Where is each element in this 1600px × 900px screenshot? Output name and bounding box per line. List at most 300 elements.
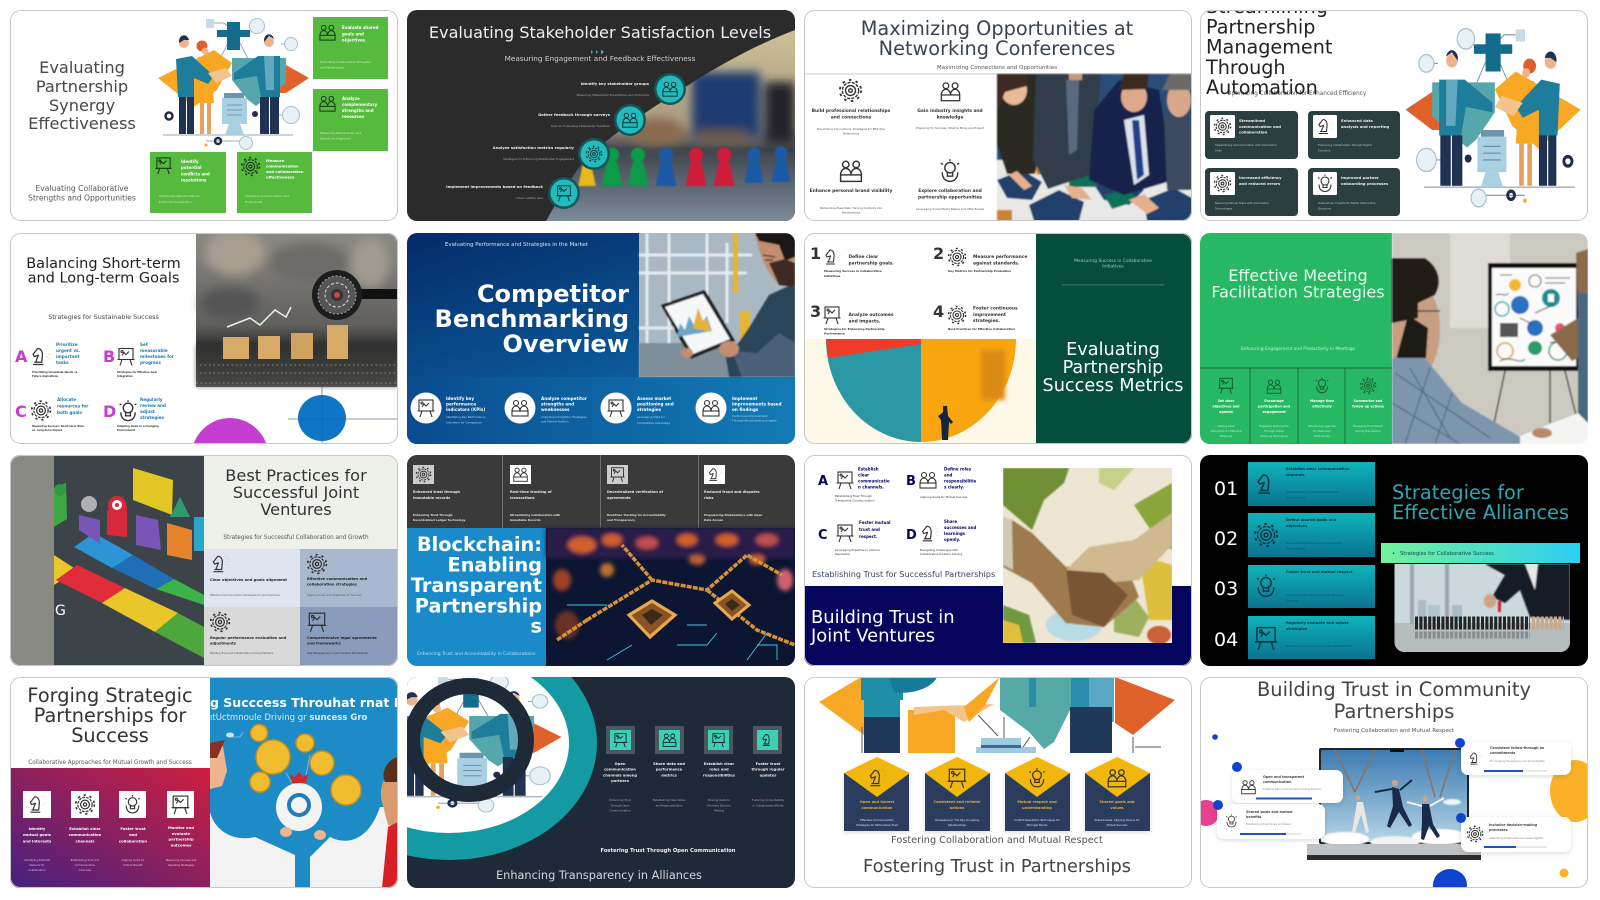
panel: communication: collaboration — [1239, 130, 1268, 135]
item: communication channels — [69, 791, 102, 872]
item: KPIs: Identifying Key Performance — [446, 415, 486, 419]
item: build relationships: Networking — [843, 132, 859, 136]
item C — [818, 520, 891, 556]
item A — [15, 342, 81, 378]
item B: and — [944, 472, 953, 478]
cell: communication — [300, 549, 397, 607]
item: KPIs — [410, 392, 486, 424]
title: Forging Strategic — [27, 684, 193, 707]
blue panel — [407, 528, 546, 666]
item B: s clearly. — [944, 484, 965, 490]
panel: shared goals: Evaluating Collaborative Strengths — [320, 60, 371, 64]
step 03: Alliances — [1286, 598, 1299, 602]
column: objectives: Set clear — [1218, 399, 1235, 403]
item C: Allocate — [57, 397, 76, 402]
title: Overview — [503, 330, 629, 358]
slide card: Building Trust in Joint Ventures — [804, 455, 1192, 666]
step: identify stakeholders: Identify key stakeholder groups — [581, 81, 650, 86]
item D: learnings — [944, 531, 966, 536]
callout: inclusive decision-making — [1456, 813, 1571, 852]
step: updates: updates — [760, 773, 777, 777]
item 2: Key Metrics for Partnership Evaluation — [948, 269, 1011, 273]
item: strengths: and Market Position — [541, 420, 569, 424]
step: roles: Informed Decision — [707, 803, 732, 807]
column: manage time: Structuring Agendas — [1308, 424, 1336, 428]
item: industry insights: knowledge — [937, 114, 963, 120]
card: shared goals: Mutual Success — [1107, 823, 1128, 827]
item: improvements — [696, 392, 782, 424]
cell: communication: Effective communication and — [307, 577, 368, 581]
panel: communication: Streamlining Communication with Automated — [1215, 143, 1277, 147]
item B: responsibilitie — [944, 478, 977, 484]
item D: Share — [944, 519, 957, 524]
title: Balancing Short-term — [26, 256, 181, 272]
column: objectives: agenda — [1219, 410, 1233, 414]
item C: Leveraging Expertise in Alliance — [835, 548, 880, 552]
callout: shared goals — [1213, 800, 1325, 839]
item: build relationships — [812, 80, 891, 136]
right panel — [1036, 233, 1192, 444]
column: objectives: Objectives for Effective — [1210, 429, 1242, 433]
panel: communication effectiveness — [237, 152, 312, 213]
item: foster trust: and — [129, 832, 137, 837]
column: summarize: During Discussions — [1355, 429, 1381, 433]
item A: Prioritizing Immediate Needs vs. — [32, 370, 78, 374]
cell: communication: collaboration strategies — [307, 582, 358, 586]
item 1: 1 — [810, 244, 821, 263]
column: tracking: Immutable Records — [510, 518, 541, 522]
subtitle: Evaluating Collaborative — [36, 184, 129, 193]
panel subtitle: Measuring Success in Collaborative — [1074, 258, 1152, 264]
column: objectives: objectives and — [1212, 404, 1240, 408]
item C: Foster mutual — [859, 520, 891, 525]
item: strengths: weaknesses — [541, 407, 570, 412]
item 2 — [933, 244, 1027, 273]
step: gather feedback — [538, 104, 646, 136]
column: trust: Enhanced trust through — [413, 490, 461, 494]
item C: trust and — [859, 527, 880, 532]
item: mutual goals: Partners for — [29, 863, 46, 867]
item: communication channels: Channels — [79, 868, 92, 872]
step 01: Development — [1286, 495, 1306, 499]
panel: shared goals: Evaluate shared — [342, 25, 379, 30]
step: gather feedback: Gather feedback through surveys — [538, 112, 611, 117]
title: Benchmarking — [435, 305, 629, 333]
photo: analyst with tablet in factory — [639, 233, 795, 377]
laptop with aerial team photo — [1307, 748, 1481, 860]
item 1: partnership goals. — [848, 260, 894, 266]
panel: conflicts and resolutions: Identifying Opportunities for — [159, 194, 201, 198]
callout: open communication: communication — [1263, 780, 1292, 784]
step 02: Define shared goals and — [1286, 518, 1337, 522]
item: foster trust: Mutual Benefit — [124, 863, 142, 867]
panel: communication effectiveness: and collaboration — [266, 169, 304, 174]
item: monitor outcomes: partnership — [168, 837, 194, 842]
slide card: Effective Meeting Facilitation Strategies — [1200, 233, 1588, 444]
item: mutual goals: Identifying Potential — [24, 858, 50, 862]
step 01: Establish clear communication — [1286, 467, 1350, 471]
item 4: Foster continuous — [973, 306, 1018, 312]
item D: D — [103, 402, 116, 421]
column: participation — [1258, 380, 1291, 438]
item 3: 3 — [810, 302, 821, 321]
panel: communication: Tools — [1214, 148, 1222, 152]
item: improvements: Implement — [732, 396, 757, 401]
gradient panel — [10, 768, 210, 888]
item 1: Measuring Success in Collaborative — [824, 269, 882, 273]
step: share data: Share data and — [653, 762, 685, 766]
title: Automation — [1206, 76, 1318, 99]
item 3: and impacts. — [848, 318, 881, 324]
slide card: Building Trust in Community Partnerships — [1193, 677, 1600, 900]
item: KPIs: Identify key — [446, 396, 474, 401]
step: share data: performance — [656, 768, 683, 772]
title: s — [531, 614, 542, 638]
step: analyze metrics: Analyze satisfaction metrics regularly — [493, 145, 575, 150]
cell: regular evaluation: Regular performance evaluation and — [210, 636, 287, 640]
step: open channels: Enhancing Trust — [609, 798, 631, 802]
item: personal brand: Enhance personal brand visibility — [810, 188, 892, 194]
callout: open communication: Fostering Open Communication Among Partners — [1263, 788, 1322, 791]
column: fraud: risks — [704, 496, 713, 500]
cell: legal agreements: Risk Management in Joint Venture Partnerships — [307, 651, 369, 655]
column: trust: Enhancing Trust Through — [413, 513, 452, 517]
panel: onboarding: Data-Driven Insights for Better Partnership — [1318, 201, 1376, 205]
slide card: Evaluating Stakeholder Satisfaction Levels — [407, 10, 795, 221]
item D: successes and — [944, 525, 976, 530]
step 04: Regularly evaluate and adjust — [1286, 621, 1349, 625]
step: updates: through regular — [751, 768, 785, 772]
photo: illustrated coins and handover — [210, 677, 402, 888]
title: Enhancing Transparency in Alliances — [496, 869, 702, 882]
card: shared goals: Shared goals and — [1099, 800, 1135, 804]
item C: both goals — [57, 410, 82, 415]
photo: wooden blocks and target lens — [196, 231, 398, 387]
cell: regular evaluation: adjustments — [210, 642, 237, 646]
title: Maximizing Opportunities at — [861, 17, 1134, 40]
subtitle: Enhancing Trust and Accountability in Collaborations — [417, 651, 536, 657]
item B: measurable — [140, 348, 168, 353]
step: open channels: Communication — [609, 809, 631, 813]
item: positioning: strategies — [637, 407, 661, 412]
item 3: Performance — [824, 332, 845, 336]
cell: communication: Aligning Goals and Objectives for Success — [307, 593, 362, 597]
column: participation: engagement — [1262, 410, 1286, 414]
step: implement improvements: Insert subtitle here — [516, 196, 543, 200]
subtitle: Maximizing Connections and Opportunities — [937, 65, 1057, 71]
slide card: Maximizing Opportunities at Networking Conferences — [804, 10, 1192, 221]
subtitle: Measuring Engagement and Feedback Effectiveness — [505, 54, 696, 63]
column: summarize: Summarize and — [1354, 399, 1383, 403]
card: consistent actions: Relationships — [948, 823, 967, 827]
title: Best Practices for — [225, 466, 367, 485]
callout: inclusive decision-making: Celebrating Collaborative Successes Together — [1489, 837, 1544, 840]
cell: legal agreements — [300, 607, 398, 666]
item D: Regularly — [140, 397, 163, 402]
card: open communication: Effective Communication — [860, 818, 894, 822]
column: summarize: Managing Time Wisely — [1353, 424, 1384, 428]
item: communication channels: communication — [69, 832, 102, 837]
subtitle: Collaborative Approaches for Mutual Growth and Success — [28, 760, 192, 766]
title: Partnerships for — [34, 704, 186, 727]
title: Partnership — [1206, 15, 1315, 38]
panel: efficiency: and reduced errors — [1239, 181, 1281, 186]
step: share data — [653, 726, 686, 807]
card: consistent actions: Consistent and reliable — [933, 800, 981, 804]
title: Success Metrics — [1042, 376, 1184, 396]
slide card: Streamlining Partnership Management Through Automation — [1200, 0, 1588, 221]
illustration: partners shaking hands — [158, 18, 309, 150]
step: updates — [751, 726, 785, 807]
step 02: Relationships — [1286, 546, 1306, 550]
item: KPIs: indicators (KPIs) — [446, 407, 485, 412]
column: tracking: transactions — [510, 496, 535, 500]
item: positioning: Competitive Advantage — [637, 421, 670, 425]
item: monitor outcomes: Monitor and — [168, 825, 194, 830]
photo: facilitator at board — [1392, 233, 1588, 444]
title: Networking Conferences — [879, 37, 1115, 60]
column: tracking: Real-time tracking of — [510, 490, 552, 494]
column: manage time: for Maximum — [1313, 429, 1331, 433]
step: share data: and Responsibilities — [656, 803, 683, 807]
item: partnership opportunities: Leveraging Social Media Before and After Events — [916, 207, 985, 211]
title: Blockchain: — [417, 533, 542, 556]
step: implement improvements: Implement improvements based on feedback — [446, 184, 543, 189]
title: Partnerships — [1334, 700, 1454, 723]
column: trust — [413, 465, 466, 522]
item 2: 2 — [933, 244, 944, 263]
panel: efficiency: Technologies — [1214, 206, 1233, 210]
panel: complementary strengths: strengths and — [342, 108, 374, 113]
title: Strategies for — [1392, 481, 1524, 504]
step: open channels: Through Open — [609, 803, 630, 807]
card: open communication — [844, 757, 910, 831]
column: manage time — [1308, 377, 1336, 438]
photo: blurred team and pawns — [546, 30, 795, 221]
title: Building Trust in Community — [1257, 678, 1531, 701]
slide card: Balancing Short-term and Long-term Goals — [10, 233, 398, 444]
item: partnership opportunities — [916, 159, 985, 211]
item 3: Strategies for Enhancing Partnership — [824, 327, 885, 331]
step 03 — [1214, 565, 1375, 608]
panel subtitle: Initiatives — [1102, 263, 1124, 269]
column: summarize: follow up actions — [1352, 404, 1384, 408]
column: objectives — [1210, 378, 1242, 438]
column: tracking: Streamlining Collaboration with — [510, 513, 560, 517]
item 4: improvement — [973, 312, 1006, 318]
step: share data: Establishing Clear Roles — [653, 798, 686, 802]
title: Joint Ventures — [810, 626, 935, 646]
panel: communication effectiveness: Analyzing Communication and — [245, 194, 289, 198]
photo: illustrated coins and handover: g Succcess Throuhat rnat F — [210, 695, 402, 710]
item D: adjust — [140, 409, 155, 414]
card: shared goals: values — [1110, 806, 1124, 810]
column: objectives: Setting Clear — [1217, 424, 1236, 428]
tagline: Fostering Trust Through Open Communication — [601, 848, 736, 854]
step 01 — [1214, 462, 1375, 506]
panel: conflicts and resolutions: resolutions — [181, 178, 207, 183]
step 04: Measuring the Impact of Collaborative Efforts — [1286, 644, 1352, 648]
step 03: Foster trust and mutual respect — [1286, 570, 1353, 574]
callout: consistent follow-through: commitments — [1490, 751, 1515, 755]
item 2: Measure performance — [973, 254, 1027, 260]
item: foster trust: collaboration — [119, 838, 147, 843]
item C: respect. — [859, 534, 878, 539]
step: open channels: channels among — [603, 773, 637, 777]
item C — [15, 397, 89, 432]
photo: glowing chain — [546, 528, 795, 666]
item: industry insights: Gain industry insights and — [917, 108, 983, 114]
panel: communication — [1205, 111, 1298, 159]
panel: shared goals — [313, 17, 388, 79]
card: mutual respect: understanding — [1022, 806, 1052, 810]
column: summarize — [1352, 378, 1384, 433]
title: Success — [71, 724, 149, 747]
panel: communication effectiveness: communication — [266, 164, 299, 168]
step 02 — [1214, 513, 1375, 557]
item: foster trust: Aligning Goals for — [122, 858, 145, 862]
decorative arrows icon — [591, 50, 604, 54]
step: roles: Making — [714, 809, 724, 813]
step: analyze metrics: Strategies for Enhancing Stakeholder Engagement — [503, 157, 575, 161]
callout: open communication: Open and transparent — [1263, 775, 1305, 779]
item D: Collaborative Problem-Solving — [920, 552, 962, 556]
callout: consistent follow-through — [1455, 738, 1571, 775]
step: gather feedback: Tools for Evaluating Stakeholder Feedback — [550, 124, 610, 128]
item 1 — [810, 244, 894, 278]
item 4 — [933, 302, 1018, 331]
column: manage time: Manage time — [1310, 399, 1335, 403]
panel: communication effectiveness: Measure — [266, 158, 285, 163]
card: open communication: Strategies for Partnership Trust — [856, 823, 898, 827]
column: objectives: Meetings — [1220, 434, 1233, 438]
item B: Aligning Goals for Mutual Success — [920, 495, 968, 499]
panel: data analysis: Solutions — [1318, 148, 1331, 152]
item 1: Initiatives — [824, 274, 841, 278]
item: industry insights — [916, 83, 985, 130]
item A: important — [56, 354, 80, 359]
item: foster trust — [119, 791, 147, 867]
step: analyze metrics — [493, 138, 610, 170]
subtitle: Fostering Collaboration and Mutual Respect — [891, 835, 1103, 846]
column: participation: participation and — [1258, 404, 1291, 408]
item D: openly. — [944, 537, 961, 542]
step: roles: Establish clear — [704, 762, 734, 766]
subtitle: Fostering Collaboration and Mutual Respect — [1334, 728, 1455, 734]
column: participation: Engaging Participants — [1259, 424, 1289, 428]
item A: Establishing Trust Through — [835, 494, 872, 498]
slide card: Blockchain: Enabling Transparent Partnerships — [407, 455, 795, 666]
item: mutual goals: and interests — [23, 838, 52, 843]
title: Partnership — [1063, 358, 1163, 378]
highlight bar — [1381, 543, 1580, 563]
panel: complementary strengths: complementary — [342, 102, 378, 107]
panel: conflicts and resolutions — [150, 152, 226, 213]
illustration: mirrored partners — [1406, 29, 1581, 207]
step: open channels: partners — [611, 779, 630, 783]
column: fraud: Empowering Stakeholders with Open — [704, 513, 762, 517]
item 3 — [810, 302, 894, 336]
step 04: 04 — [1214, 629, 1238, 651]
item: positioning: Assess market — [637, 396, 671, 401]
item 4: 4 — [933, 302, 944, 321]
item: improvements: on findings — [732, 407, 759, 412]
panel: communication effectiveness: effectiveness — [266, 174, 295, 180]
step: updates: Foster trust — [756, 762, 781, 766]
column: tracking — [510, 465, 560, 522]
item 1: Define clear — [848, 254, 879, 260]
item: monitor outcomes — [166, 791, 197, 867]
slide card: Best Practices for Successful Joint Ventures — [10, 455, 398, 666]
item: positioning: Leveraging Data for — [637, 415, 666, 419]
column: verification: Decentralized verification of — [607, 490, 664, 494]
title: Through — [1205, 56, 1286, 79]
panel: efficiency: Increased efficiency — [1239, 175, 1282, 180]
item: mutual goals — [23, 791, 52, 872]
column: participation: Through Active — [1263, 429, 1284, 433]
callout: consistent follow-through: Consistent follow-through on — [1490, 746, 1545, 750]
item C: vs. Long-term Impact — [32, 428, 63, 432]
title: Synergy — [49, 96, 116, 115]
cell: legal agreements: Comprehensive legal agreements — [307, 636, 378, 640]
step 03: Communication Techniques for Stronger — [1286, 593, 1345, 597]
item A: Establish — [858, 466, 879, 472]
step: roles: responsibilities — [703, 773, 736, 777]
panel: complementary strengths: Analyze — [342, 96, 360, 101]
column: participation: Encourage — [1264, 399, 1285, 403]
column: verification: agreements — [607, 496, 631, 500]
column: verification — [607, 465, 666, 522]
panel: complementary strengths: resources — [342, 114, 365, 119]
item 4: strategies. — [973, 318, 1000, 324]
highlight bar: Strategies for Collaborative Success — [1400, 551, 1494, 557]
item: improvements: Through Benchmarking Insights — [731, 418, 777, 422]
item: KPIs: performance — [446, 402, 476, 406]
item: strengths: strengths and — [541, 402, 574, 406]
panel heading — [204, 455, 398, 549]
item A: n channels. — [858, 484, 884, 490]
item: partnership opportunities: Explore collaboration and — [918, 188, 982, 194]
cell: clear objectives — [204, 549, 300, 607]
card: open communication: Open and honest — [860, 800, 895, 804]
slide card: Enhancing Transparency in Alliances — [301, 626, 795, 888]
title: Ventures — [260, 500, 332, 519]
panel: conflicts and resolutions: conflicts and — [181, 171, 210, 176]
panel: communication: Streamlined — [1239, 118, 1265, 123]
slide card: Evaluating Partnership Synergy Effectiveness — [10, 10, 398, 221]
panel: conflicts and resolutions: potential — [181, 165, 202, 170]
title: Effective Meeting — [1228, 266, 1368, 285]
column: verification: and Transparency — [607, 518, 635, 522]
item C: C — [15, 402, 27, 421]
item B — [103, 342, 175, 378]
item: personal brand: Relationships — [842, 210, 861, 214]
item: build relationships: Maximizing Connections: Strategies for Effective — [817, 127, 885, 131]
item 2: against standards. — [973, 260, 1020, 266]
step: open channels — [603, 726, 637, 813]
title: Competitor — [477, 280, 629, 308]
panel: shared goals: objectives — [342, 38, 366, 43]
card: shared goals: Shared Goals: Aligning Visions for — [1094, 818, 1141, 822]
card: consistent actions: actions — [950, 806, 964, 810]
item: personal brand: Networking Essentials: Turning Contacts into — [820, 206, 883, 210]
step: identify stakeholders: Measuring Stakeholder Expectations and Outcomes — [577, 93, 650, 97]
card: consistent actions: Transparency: The Key to Lasting — [934, 818, 979, 822]
panel: data analysis — [1308, 111, 1400, 159]
step: identify stakeholders — [577, 73, 686, 105]
step: implement improvements — [446, 177, 580, 209]
item: monitor outcomes: evaluate — [172, 831, 191, 836]
